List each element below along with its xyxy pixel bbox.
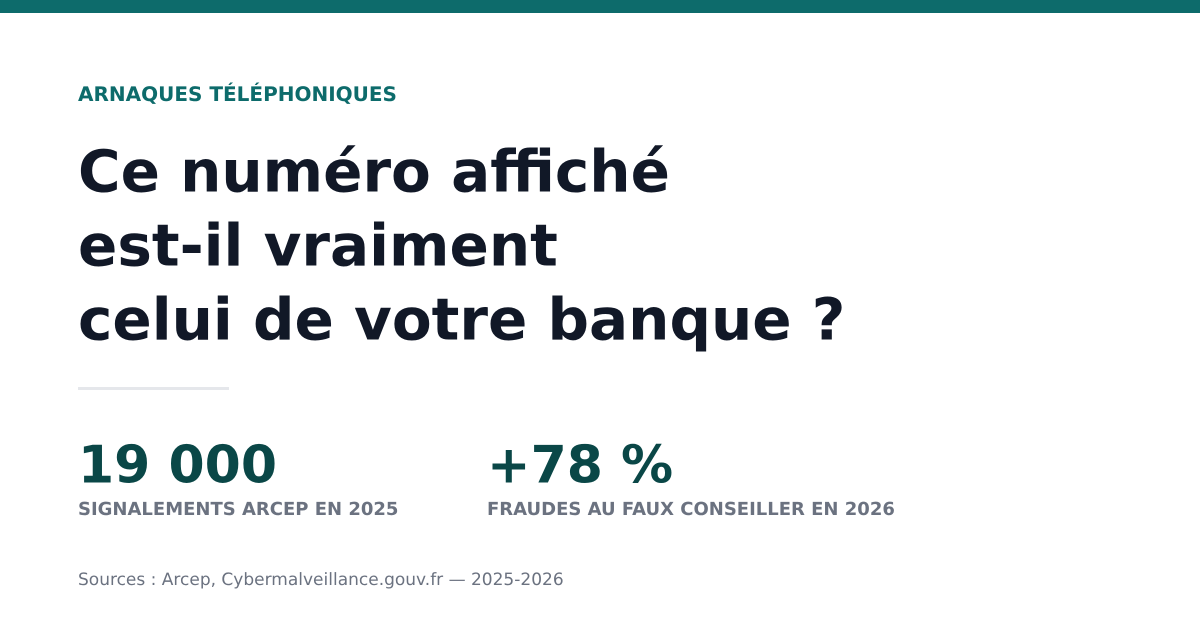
- sources: Sources : Arcep, Cybermalveillance.gouv.fr — 2025-2026: [78, 570, 564, 590]
- stat: fraudes: [487, 436, 895, 520]
- divider: [78, 387, 229, 390]
- title: Ce numéro affiché: [78, 138, 670, 206]
- title: [78, 138, 845, 354]
- stat: signalements: [78, 436, 398, 520]
- stat number: 19 000: [78, 436, 277, 496]
- title: est-il vraiment: [78, 212, 558, 280]
- top bar: [0, 0, 1200, 13]
- stat number: +78 %: [487, 436, 673, 496]
- stat label: FRAUDES AU FAUX CONSEILLER EN 2026: [487, 499, 895, 520]
- eyebrow heading: ARNAQUES TÉLÉPHONIQUES: [78, 82, 397, 106]
- stat label: SIGNALEMENTS ARCEP EN 2025: [78, 499, 398, 520]
- title: celui de votre banque ?: [78, 286, 845, 354]
